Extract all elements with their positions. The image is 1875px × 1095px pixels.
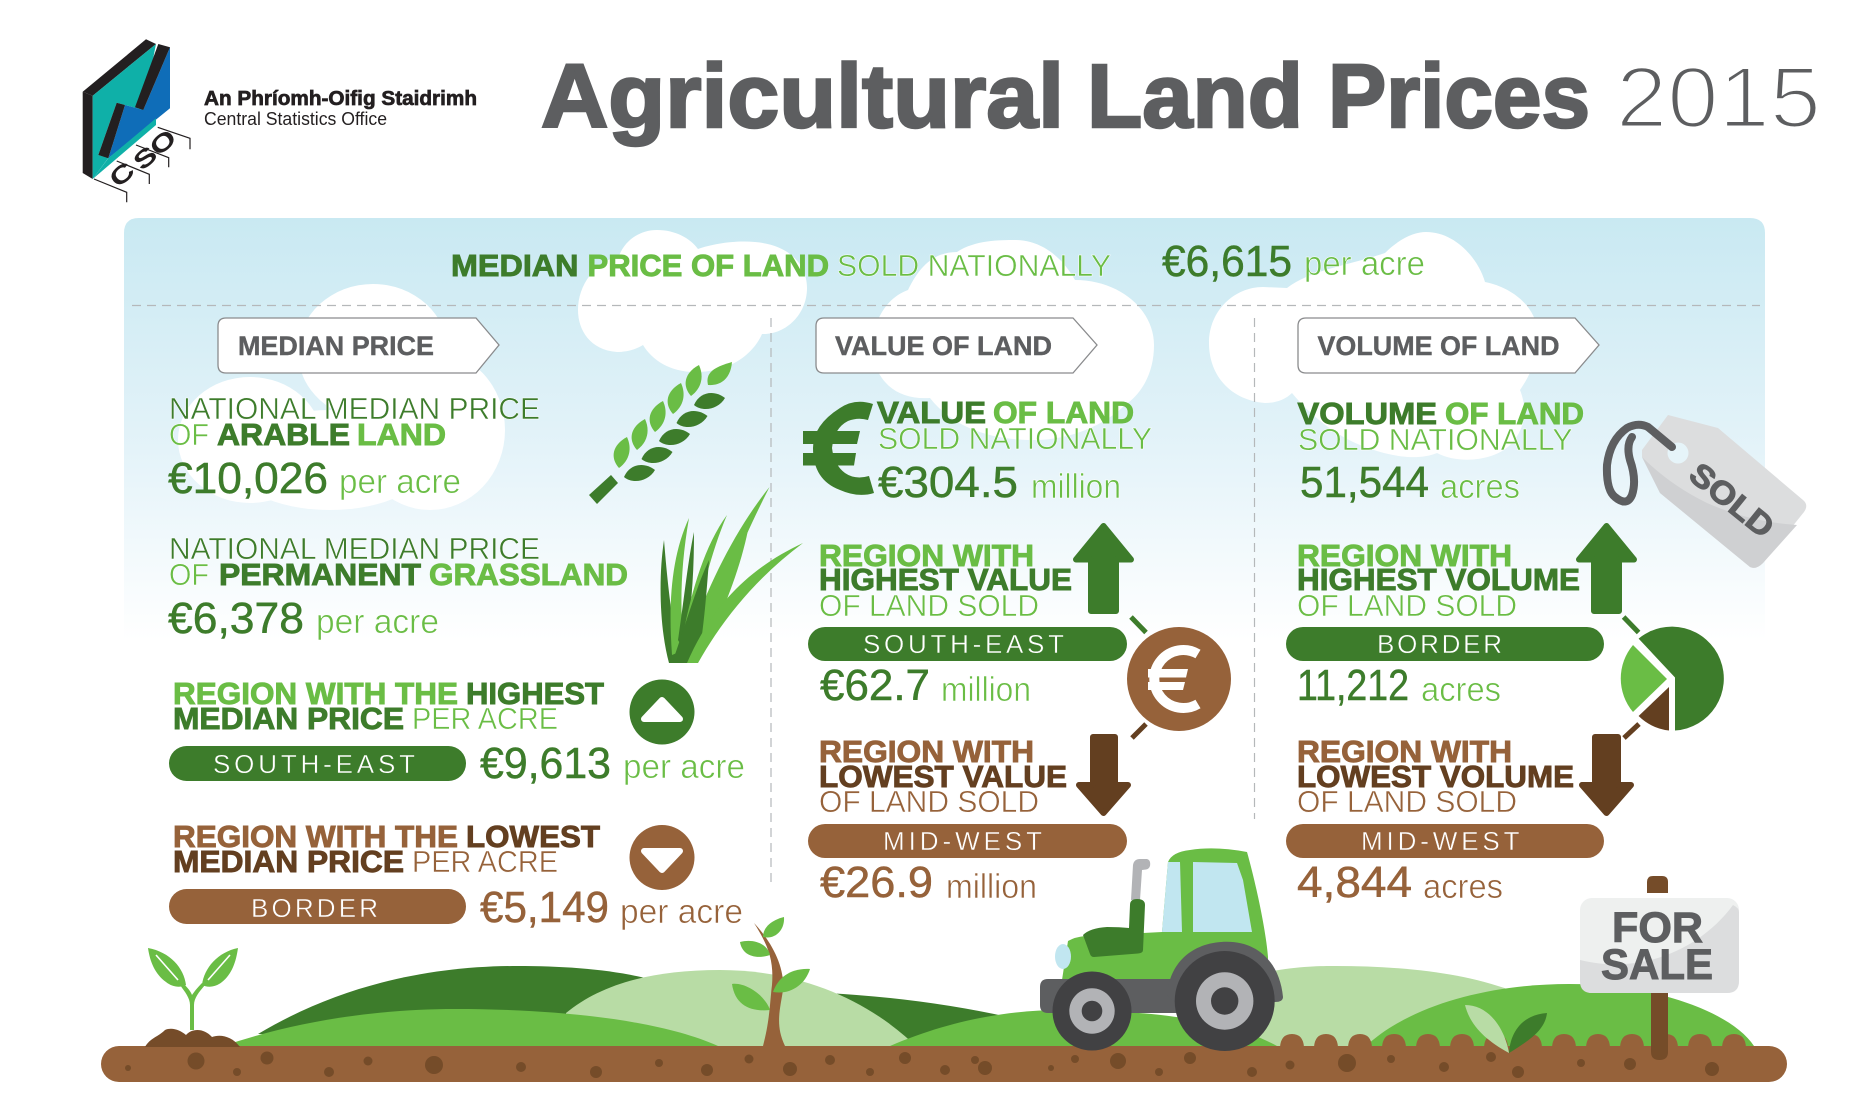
icon: up circle (630, 680, 694, 744)
logo: Central Statistics Office: An Phríomh-Oifig Staidrimh (204, 88, 477, 110)
tab: volume of land (1298, 318, 1599, 373)
icon: large euro (803, 402, 874, 495)
logo: Central Statistics Office: C (104, 157, 140, 193)
text: lowest volume (1297, 735, 1574, 819)
value: border volume: acres (1421, 671, 1501, 709)
value: mid-west volume: acres (1423, 868, 1503, 906)
value: south-east price (480, 740, 745, 788)
text: highest volume: OF LAND SOLD (1297, 589, 1517, 623)
pill: border (1286, 627, 1604, 661)
text: permanent grassland: GRASSLAND (429, 558, 628, 592)
icon: sold tag (1607, 415, 1806, 568)
icon: down arrow (1079, 737, 1128, 813)
pill: border: BORDER (251, 893, 378, 923)
value: mid-west value: €26.9 (820, 859, 933, 907)
text: lowest volume: REGION WITH (1297, 735, 1512, 769)
icon: up arrow (1076, 526, 1131, 611)
icon: up arrow (1579, 526, 1634, 611)
value: mid-west value (820, 859, 1037, 907)
text: value sold nationally: OF LAND (993, 396, 1134, 430)
text: highest median price (173, 677, 604, 736)
text: volume sold nationally: OF LAND (1445, 397, 1584, 431)
text: lowest median price: REGION WITH THE (173, 820, 458, 854)
pill: mid-west (808, 824, 1127, 858)
text: volume sold nationally (1298, 397, 1584, 507)
panel: median price (168, 318, 803, 932)
value: border price: per acre (620, 893, 743, 931)
value: border price (480, 884, 743, 932)
pill: south-east: SOUTH-EAST (863, 629, 1064, 659)
text: volume sold nationally: 51,544 (1300, 459, 1429, 507)
text: highest median price: PER ACRE (412, 702, 558, 736)
text: value sold nationally: VALUE (877, 396, 986, 430)
value: south-east value: million (941, 671, 1031, 709)
text: highest value: OF LAND SOLD (819, 589, 1039, 623)
headline: median price of land sold nationally: per acre (1304, 245, 1425, 283)
pill: south-east: SOUTH-EAST (213, 749, 415, 779)
tab: median price (218, 318, 499, 373)
text: volume sold nationally: acres (1440, 468, 1520, 506)
text: arable land: LAND (357, 418, 446, 452)
icon: down circle (630, 825, 694, 890)
headline: median price of land sold nationally: €6,615 (1162, 238, 1292, 286)
text: lowest median price (173, 820, 600, 879)
text: lowest value: REGION WITH (819, 735, 1034, 769)
text: permanent grassland: PERMANENT (219, 558, 421, 592)
text: highest value: REGION WITH (819, 539, 1034, 573)
text: lowest volume: OF LAND SOLD (1297, 785, 1517, 819)
icon: seedling (145, 948, 240, 1047)
text: highest median price: HIGHEST (466, 677, 604, 711)
text: volume sold nationally: VOLUME (1298, 397, 1437, 431)
title: Agricultural (541, 47, 1064, 147)
icon: leaves (1465, 1005, 1547, 1053)
sign: for sale (1580, 876, 1739, 1060)
text: value sold nationally (877, 396, 1152, 507)
title: 2015 (1616, 50, 1821, 146)
icon: grass (661, 487, 803, 663)
text: lowest value: OF LAND SOLD (819, 785, 1039, 819)
value: mid-west volume: 4,844 (1297, 859, 1412, 907)
logo: Central Statistics Office: O (144, 124, 182, 162)
value: mid-west value: million (946, 868, 1037, 906)
icon: tractor (1040, 848, 1283, 1051)
text: arable land (168, 392, 540, 503)
text: value sold nationally: €304.5 (878, 459, 1018, 507)
panel: value of land (803, 318, 1231, 907)
text: highest value (819, 539, 1072, 623)
text: lowest value: LOWEST VALUE (819, 760, 1067, 794)
tab: median price: MEDIAN PRICE (238, 331, 434, 361)
value: border volume (1297, 662, 1501, 710)
text: highest value: HIGHEST VALUE (819, 563, 1072, 597)
pill: mid-west: MID-WEST (883, 826, 1042, 856)
headline: median price of land sold nationally: SOLD NATIONALLY (837, 249, 1111, 283)
text: highest volume: REGION WITH (1297, 539, 1512, 573)
pill: border (169, 889, 466, 924)
title: Prices (1328, 47, 1590, 147)
text: lowest median price: MEDIAN PRICE (173, 845, 404, 879)
pill: border: BORDER (1377, 629, 1502, 659)
tab: volume of land: VOLUME OF LAND (1318, 331, 1560, 361)
sign: for sale: FOR (1612, 904, 1703, 952)
pill: south-east (808, 627, 1127, 661)
text: arable land: per acre (339, 463, 461, 501)
title (541, 47, 1821, 147)
value: border volume: 11,212 (1297, 662, 1409, 710)
text: permanent grassland: OF (169, 558, 209, 592)
icon: young tree (732, 917, 810, 1046)
text: value sold nationally: million (1031, 468, 1121, 506)
text: permanent grassland: €6,378 (168, 595, 304, 643)
text: lowest median price: LOWEST (466, 820, 600, 854)
text: permanent grassland: NATIONAL MEDIAN PRICE (169, 532, 540, 566)
text: permanent grassland (168, 532, 628, 643)
landscape: hills (223, 966, 1754, 1050)
text: volume sold nationally: SOLD NATIONALLY (1298, 423, 1572, 457)
text: lowest volume: LOWEST VOLUME (1297, 760, 1574, 794)
tab: value of land: VALUE OF LAND (835, 331, 1052, 361)
value: mid-west volume (1297, 859, 1503, 907)
text: permanent grassland: per acre (316, 603, 439, 641)
logo: Central Statistics Office: Central Statistics Office (204, 109, 387, 129)
title: Land (1087, 47, 1303, 147)
landscape: ground with soil (101, 1034, 1787, 1082)
value: south-east value (820, 662, 1031, 710)
panel: volume of land (1286, 318, 1806, 907)
tab: value of land (816, 318, 1097, 373)
value: south-east value: €62.7 (820, 662, 930, 710)
icon: wheat (589, 362, 732, 504)
value: border price: €5,149 (480, 884, 609, 932)
text: value sold nationally: SOLD NATIONALLY (878, 422, 1152, 456)
logo: Central Statistics Office (83, 39, 477, 202)
icon: euro coin (1127, 617, 1231, 738)
logo: Central Statistics Office: S (128, 141, 163, 176)
text: lowest value (819, 735, 1067, 819)
headline: median price of land sold nationally: MEDIAN (451, 249, 578, 283)
text: arable land: ARABLE (217, 418, 350, 452)
dashed dividers (132, 306, 1760, 884)
text: highest volume (1297, 539, 1580, 623)
headline: median price of land sold nationally: PRICE OF LAND (588, 249, 829, 283)
pill: south-east (169, 746, 466, 781)
sign: for sale: SALE (1601, 941, 1713, 989)
headline: median price of land sold nationally (451, 238, 1425, 286)
pill: mid-west: MID-WEST (1361, 826, 1520, 856)
text: arable land: NATIONAL MEDIAN PRICE (169, 392, 540, 426)
text: highest median price: MEDIAN PRICE (173, 702, 404, 736)
text: lowest median price: PER ACRE (412, 845, 558, 879)
icon: sold tag: SOLD (1682, 455, 1781, 545)
text: arable land: OF (169, 418, 209, 452)
icon: down arrow (1582, 737, 1631, 813)
value: south-east price: per acre (623, 748, 745, 786)
icon: pie chart (1621, 617, 1724, 738)
text: highest median price: REGION WITH THE (173, 677, 458, 711)
text: highest volume: HIGHEST VOLUME (1297, 563, 1580, 597)
value: south-east price: €9,613 (480, 740, 611, 788)
clouds (178, 230, 1538, 510)
panel: sky background (124, 218, 1765, 640)
text: arable land: €10,026 (168, 455, 328, 503)
pill: mid-west (1286, 824, 1604, 858)
